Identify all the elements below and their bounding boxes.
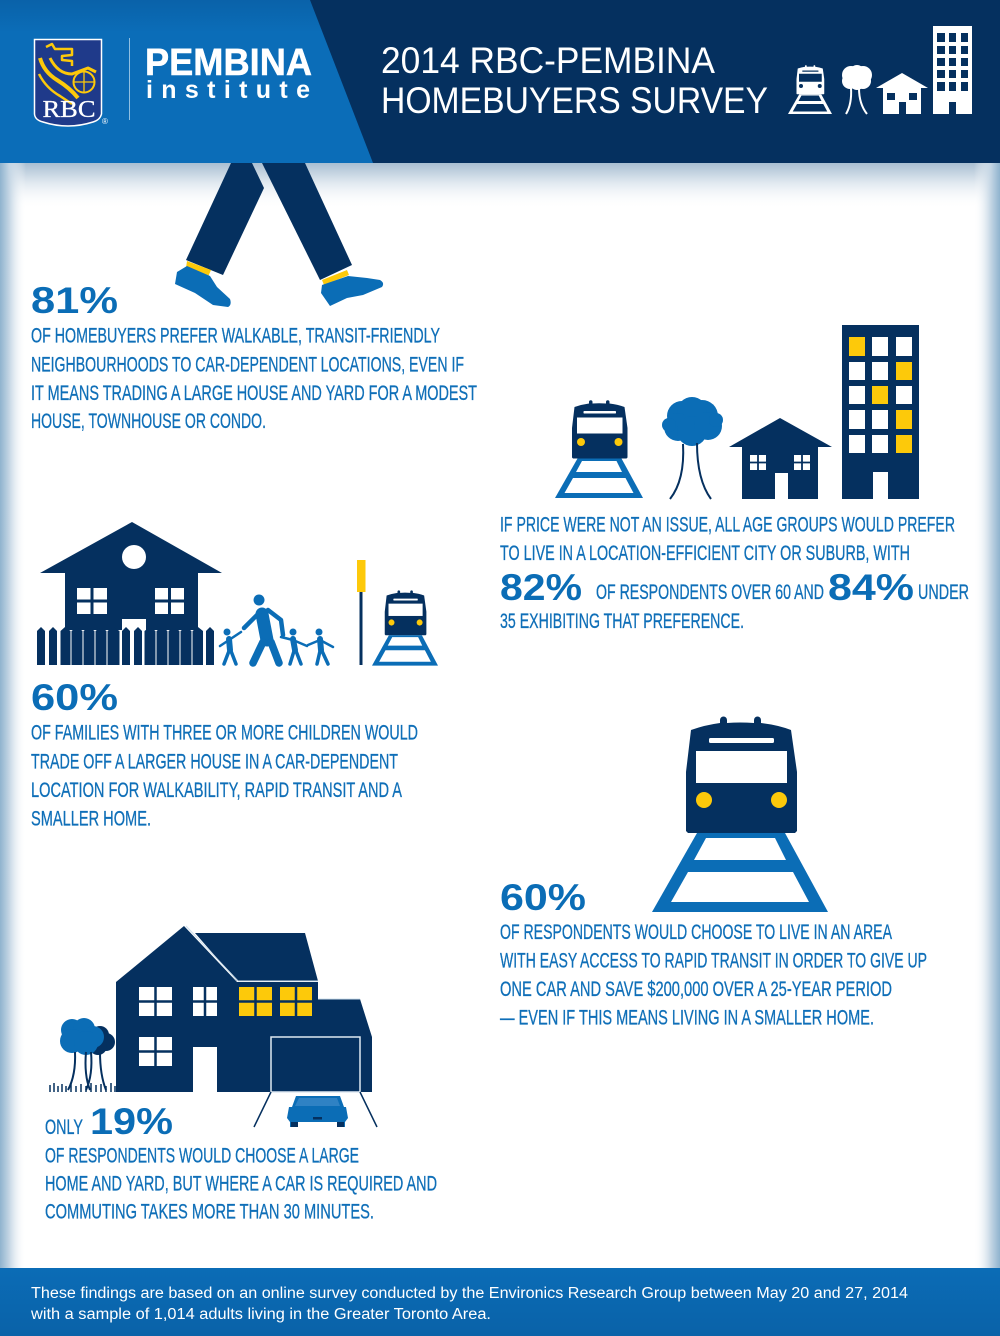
stat block: location-efficient preference: UNDER	[918, 581, 969, 604]
stat block: only 19%	[45, 1101, 437, 1224]
footer band: with a sample of 1,014 adults living in the Greater Toronto Area.	[30, 1306, 491, 1323]
stat block: 60% of families: SMALLER HOME.	[31, 808, 151, 830]
Pembina Institute logo: PEMBINA	[145, 42, 312, 84]
icons: train, tree, house, tower	[555, 325, 919, 499]
title	[381, 40, 768, 121]
stat block: only 19%: HOME AND YARD, BUT WHERE A CAR IS REQUIRED AND	[45, 1172, 437, 1196]
stat block: location-efficient preference	[500, 514, 969, 633]
car	[287, 1096, 348, 1127]
family house	[40, 522, 222, 633]
stat block: 81% walkable: NEIGHBOURHOODS TO CAR-DEPENDENT LOCATIONS, EVEN IF	[31, 354, 464, 376]
stat block: only 19%: OF RESPONDENTS WOULD CHOOSE A LARGE	[45, 1144, 359, 1168]
stat block: 60% of families: TRADE OFF A LARGER HOUSE IN A CAR-DEPENDENT	[31, 750, 398, 774]
stat block: location-efficient preference: 82%	[500, 567, 582, 608]
stat block: only 19%: 19%	[90, 1101, 173, 1142]
stat block: 60% rapid transit: 60%	[500, 877, 586, 918]
illustration: large suburban house with car and trees	[50, 926, 377, 1127]
house	[729, 418, 832, 499]
stat block: 60% rapid transit	[500, 877, 927, 1030]
stat block: 81% walkable	[31, 280, 477, 433]
header blue logo panel	[0, 0, 373, 163]
footer band	[0, 1268, 1000, 1336]
stat block: location-efficient preference: 84%	[828, 567, 914, 608]
RBC logo	[34, 40, 108, 126]
stat block: 60% of families	[31, 677, 418, 830]
title: 2014 RBC-PEMBINA	[381, 40, 715, 81]
tree	[662, 397, 723, 499]
illustration: family house with fence, family and transit stop	[37, 522, 438, 666]
stat block: location-efficient preference: OF RESPONDENTS OVER 60 AND	[596, 581, 824, 604]
family figures	[220, 594, 333, 664]
small train	[372, 590, 438, 666]
icon: walking legs	[175, 163, 383, 307]
stat block: 60% of families: 60%	[31, 677, 118, 718]
logo divider	[129, 38, 130, 120]
stat block: only 19%: ONLY	[45, 1116, 83, 1139]
stat block: 60% of families: OF FAMILIES WITH THREE OR MORE CHILDREN WOULD	[31, 722, 418, 744]
footer band: These findings are based on an online survey conducted by the Environics Research Group between May 20 and 27, 2014	[31, 1285, 908, 1302]
stat block: 81% walkable: HOUSE, TOWNHOUSE OR CONDO.	[31, 410, 266, 433]
icon: large train on tracks	[652, 716, 828, 912]
stat block: 81% walkable: OF HOMEBUYERS PREFER WALKABLE, TRANSIT-FRIENDLY	[31, 324, 440, 348]
trees and grass	[50, 1018, 115, 1092]
garage	[271, 1037, 360, 1092]
RBC logo: RBC	[42, 97, 96, 123]
stat block: 81% walkable: 81%	[31, 280, 118, 321]
transit stop pole	[357, 560, 366, 665]
header band	[0, 0, 1000, 163]
header train	[788, 65, 832, 114]
apartment tower	[842, 325, 919, 499]
door	[193, 1047, 217, 1093]
title: HOMEBUYERS SURVEY	[381, 80, 768, 121]
stat block: 81% walkable: IT MEANS TRADING A LARGE HOUSE AND YARD FOR A MODEST	[31, 382, 477, 405]
picket fence	[37, 627, 214, 665]
Pembina Institute logo: institute	[146, 76, 310, 104]
RBC logo: ®	[102, 117, 108, 126]
windows	[139, 987, 312, 1066]
header tree	[842, 65, 872, 114]
house silhouette	[116, 926, 372, 1092]
stat block: location-efficient preference: 35 EXHIBITING THAT PREFERENCE.	[500, 610, 744, 633]
header tower	[933, 26, 972, 114]
driveway lines	[254, 1092, 377, 1127]
header house	[876, 73, 928, 114]
train	[555, 400, 643, 498]
stat block: only 19%: COMMUTING TAKES MORE THAN 30 MINUTES.	[45, 1200, 374, 1224]
stat block: 60% of families: LOCATION FOR WALKABILITY, RAPID TRANSIT AND A	[31, 779, 402, 802]
icons: header train, tree, house, tower	[788, 26, 972, 114]
Pembina Institute logo	[145, 42, 312, 104]
